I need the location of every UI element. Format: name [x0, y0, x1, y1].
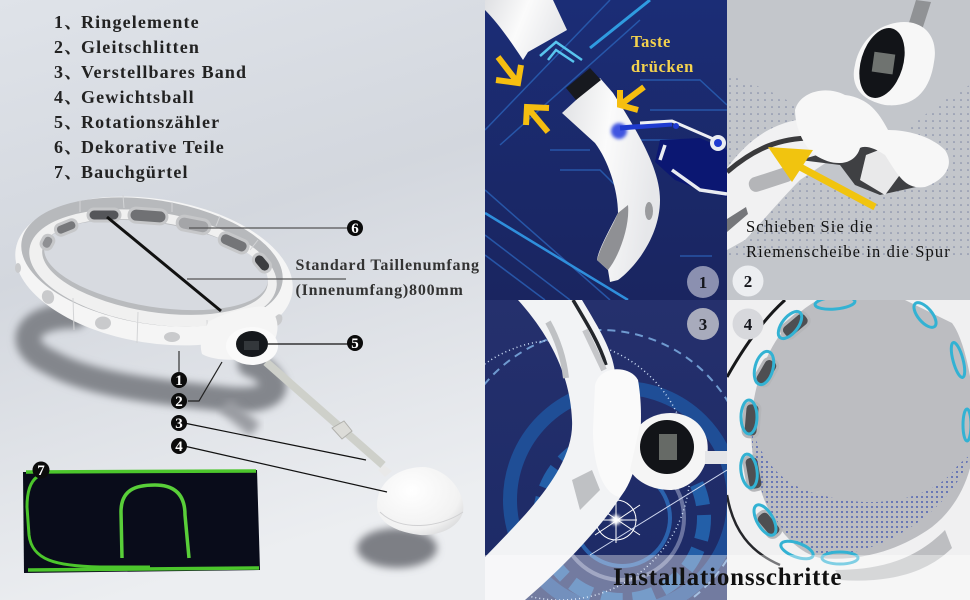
parts list: 3、 [54, 62, 83, 82]
slider body [795, 90, 949, 187]
parts list: Verstellbares Band [81, 62, 247, 82]
callout badges: 2 [175, 394, 183, 410]
waist circumference label: (Innenumfang)800mm [296, 282, 464, 299]
step badge 3: 3 [699, 315, 707, 334]
parts list: 4、 [54, 87, 83, 107]
slide instruction: Riemenscheibe in die Spur [746, 242, 951, 261]
yellow arrow [800, 164, 877, 210]
parts list: Dekorative Teile [81, 137, 225, 157]
caption: Installationsschritte: Installationsschritte [613, 564, 842, 591]
step badge 2 [732, 266, 764, 296]
slider carriage [201, 307, 278, 360]
blue dot field [752, 430, 970, 554]
robot hand [620, 121, 727, 197]
parts list: Gewichtsball [81, 87, 195, 107]
parts list: 1、 [54, 12, 83, 32]
upper ring segment [485, 0, 567, 60]
waist circumference label: Standard Taillenumfang [296, 257, 480, 274]
step badge 4: 4 [744, 315, 753, 334]
step badge 3 [687, 308, 719, 340]
slide instruction [746, 217, 951, 261]
step badge 1: 1 [699, 273, 707, 292]
parts list: 7、 [54, 162, 83, 182]
outer grey dots [15, 263, 284, 342]
ball shadow [357, 528, 437, 568]
yellow arrows [496, 57, 644, 132]
weight ball [377, 465, 463, 535]
parts list: Gleitschlitten [81, 37, 200, 57]
strap [909, 0, 931, 28]
star burst [595, 497, 640, 543]
counter strap [266, 362, 383, 465]
cyan ovals [739, 295, 970, 564]
ring [485, 300, 625, 600]
counter [630, 413, 727, 490]
button glow [611, 123, 627, 139]
step badge 4 [732, 308, 764, 340]
parts list: Rotationszähler [81, 112, 220, 132]
panel 3: attach counter [485, 300, 727, 600]
parts list [54, 12, 247, 182]
parts list: Ringelemente [81, 12, 200, 32]
connector tip [566, 68, 601, 100]
panel: product overview [0, 0, 485, 600]
dotted wave [727, 75, 970, 260]
parts list: 6、 [54, 137, 83, 157]
slider cap [614, 369, 641, 496]
parts list: Bauchgürtel [81, 162, 189, 182]
ring windows [743, 310, 812, 540]
callout badges: 6 [351, 221, 359, 237]
panel 1: press button [485, 0, 727, 300]
Taste drücken label [631, 36, 694, 72]
parts list: 2、 [54, 37, 83, 57]
lower ring segment [562, 78, 660, 282]
callout badges: 4 [175, 439, 183, 455]
callout leader lines [107, 217, 387, 492]
belly belt [23, 462, 260, 573]
Taste drücken label: Taste [631, 32, 671, 51]
panel 2: slide pulley [727, 0, 970, 300]
parts list: 5、 [54, 112, 83, 132]
step badge 2: 2 [744, 272, 752, 291]
hoop ring [4, 178, 304, 364]
Taste drücken label: drücken [631, 57, 694, 76]
callout badges: 5 [351, 336, 359, 352]
waist circumference label [296, 257, 480, 299]
ring segment seams [73, 195, 258, 345]
slide instruction: Schieben Sie die [746, 217, 874, 236]
panel 4: closed ring [727, 295, 970, 600]
belt badge: 7 [37, 463, 45, 479]
callout badges: 1 [175, 373, 183, 389]
concentric tech rings [485, 329, 727, 600]
step badge 1 [687, 266, 719, 298]
belt badge [32, 462, 50, 479]
ring track [727, 118, 830, 250]
callout badges [171, 220, 363, 455]
caption band [485, 555, 970, 600]
ring opening [751, 300, 970, 559]
decorative inner windows [39, 208, 273, 275]
callout badges: 3 [175, 416, 183, 432]
counter [854, 22, 935, 105]
ring shadow [28, 316, 274, 400]
circuit traces [485, 0, 727, 300]
counter housing [226, 327, 278, 365]
strap buckle [332, 421, 352, 439]
